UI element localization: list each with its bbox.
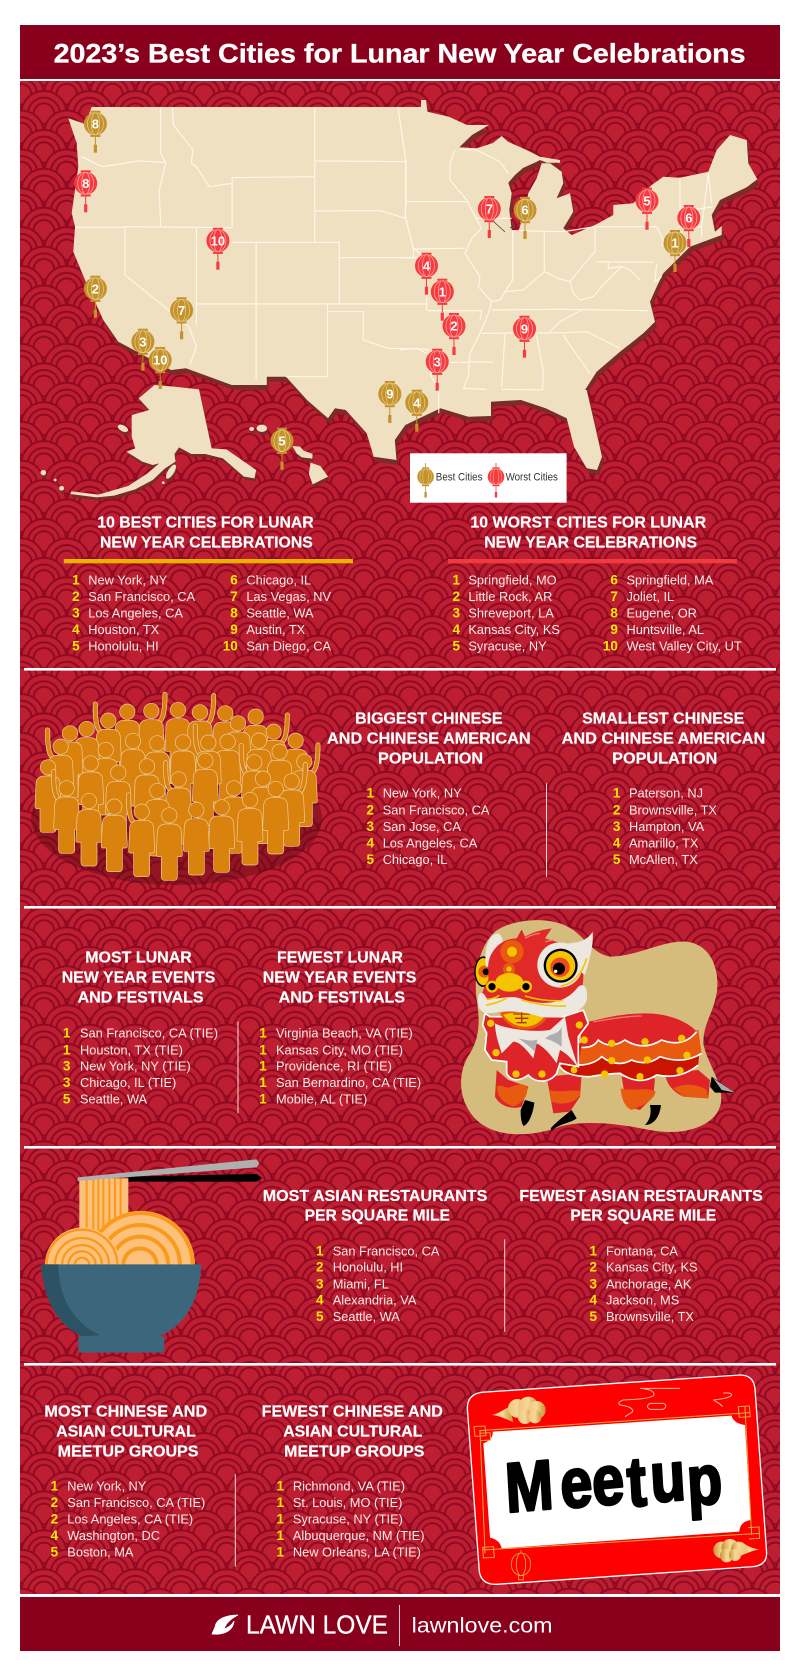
heading: fewest meetup groups: MEETUP GROUPS <box>284 1443 425 1460</box>
list: fewest restaurants: Kansas City, KS <box>606 1260 698 1275</box>
legend best lantern <box>417 463 434 498</box>
best city lanterns: 4 <box>413 395 421 410</box>
title banner: 2023’s Best Cities for Lunar New Year Celebrations <box>54 39 746 69</box>
grey chopstick <box>78 1159 259 1181</box>
list: smallest population: 1 <box>613 786 621 801</box>
list: fewest events: Providence, RI (TIE) <box>276 1059 392 1074</box>
best city lanterns: 10 <box>153 353 167 368</box>
noodle coils <box>45 1211 195 1265</box>
best city lanterns: 6 <box>521 203 529 218</box>
list: fewest restaurants: 1 <box>589 1243 597 1258</box>
list: fewest meetup groups: New Orleans, LA (TIE) <box>293 1545 421 1560</box>
list: most events: 3 <box>63 1059 71 1074</box>
best city lanterns: 9 <box>386 387 393 402</box>
heading: most events: AND FESTIVALS <box>78 989 204 1006</box>
list: fewest events: 1 <box>259 1075 267 1090</box>
heading: 10 worst cities: NEW YEAR CELEBRATIONS <box>484 534 697 551</box>
lion beard <box>495 1017 578 1068</box>
worst city lanterns: 5 <box>643 193 651 208</box>
brand name: LAWN LOVE <box>246 1609 388 1639</box>
list: most events: Chicago, IL (TIE) <box>80 1075 176 1090</box>
list: biggest population <box>366 786 490 867</box>
list: 10 worst cities: Eugene, OR <box>626 606 697 621</box>
map legend: Worst Cities <box>506 471 558 483</box>
list: most meetup groups: 4 <box>51 1528 59 1543</box>
list: fewest meetup groups: St. Louis, MO (TIE) <box>293 1495 402 1510</box>
heading: 10 worst cities: 10 WORST CITIES FOR LUNAR <box>470 514 707 531</box>
list: biggest population: San Francisco, CA <box>383 802 490 817</box>
worst city lanterns: 10 <box>211 233 225 248</box>
heading: fewest restaurants: PER SQUARE MILE <box>570 1208 717 1225</box>
list: smallest population: 3 <box>613 819 621 834</box>
list: fewest restaurants: Fontana, CA <box>606 1243 678 1258</box>
list: most meetup groups: 1 <box>51 1478 59 1493</box>
list: smallest population: 2 <box>613 802 620 817</box>
list: fewest events: Mobile, AL (TIE) <box>276 1092 367 1107</box>
list: most meetup groups <box>51 1478 205 1560</box>
black chopstick <box>128 1174 262 1182</box>
list: fewest events <box>259 1026 421 1107</box>
list: most meetup groups: 2 <box>51 1495 58 1510</box>
list: most restaurants: Seattle, WA <box>333 1309 400 1324</box>
Meetup wordmark: Meetup <box>503 1436 724 1528</box>
list: 10 worst cities: 5 <box>452 639 460 654</box>
list: 10 worst cities: 4 <box>452 622 460 637</box>
list: 10 worst cities: 10 <box>603 639 618 654</box>
lion legs <box>495 1070 735 1131</box>
list: fewest events: Virginia Beach, VA (TIE) <box>276 1026 413 1041</box>
list: most events: Seattle, WA <box>80 1092 148 1107</box>
heading: most restaurants <box>263 1188 488 1225</box>
best city lanterns <box>84 111 686 470</box>
list: 10 worst cities: Huntsville, AL <box>626 622 704 637</box>
list: fewest restaurants: 5 <box>589 1309 597 1324</box>
list: 10 worst cities: 2 <box>452 589 460 604</box>
list: 10 best cities: 8 <box>230 606 238 621</box>
worst city lanterns: 1 <box>439 284 446 299</box>
heading: fewest meetup groups: ASIAN CULTURAL <box>283 1424 423 1441</box>
list: fewest meetup groups: Syracuse, NY (TIE) <box>293 1511 403 1526</box>
list: 10 worst cities: Shreveport, LA <box>468 606 554 621</box>
list: biggest population: Chicago, IL <box>383 852 447 867</box>
heading: fewest meetup groups <box>262 1404 443 1460</box>
list: most restaurants: Alexandria, VA <box>333 1293 417 1308</box>
worst city lanterns: 6 <box>685 211 692 226</box>
list: 10 worst cities: 9 <box>610 622 618 637</box>
heading: biggest population <box>327 710 531 767</box>
list: fewest events: 1 <box>259 1042 267 1057</box>
list: smallest population: Brownsville, TX <box>629 802 717 817</box>
Lake Michigan connector lines <box>493 221 522 232</box>
list: fewest events: Kansas City, MO (TIE) <box>276 1042 403 1057</box>
illustration: lion dance <box>461 920 735 1134</box>
worst city lanterns: 9 <box>521 321 528 336</box>
gold clouds <box>492 1397 759 1562</box>
heading: most events: MOST LUNAR <box>85 950 192 967</box>
heading: fewest events <box>263 950 417 1006</box>
list: fewest meetup groups: 1 <box>276 1528 284 1543</box>
heading: 10 best cities: NEW YEAR CELEBRATIONS <box>100 534 313 551</box>
list: fewest events: 1 <box>259 1026 267 1041</box>
list: smallest population: Amarillo, TX <box>629 836 699 851</box>
list: fewest events: San Bernardino, CA (TIE) <box>276 1075 421 1090</box>
heading: fewest restaurants <box>519 1188 763 1225</box>
eastern state lines <box>400 149 713 390</box>
heading: 10 best cities: 10 BEST CITIES FOR LUNAR <box>97 514 314 531</box>
yellow underline bar <box>64 559 353 563</box>
list: biggest population: 2 <box>366 802 374 817</box>
map of the United States with lanterns <box>41 100 759 500</box>
list: fewest restaurants: Jackson, MS <box>606 1293 679 1308</box>
tan blob background <box>461 920 721 1134</box>
heading: fewest events: FEWEST LUNAR <box>277 950 403 967</box>
list: 10 best cities: Honolulu, HI <box>88 639 159 654</box>
list: 10 worst cities: Little Rock, AR <box>468 589 552 604</box>
map legend <box>410 453 567 503</box>
footer <box>20 1597 780 1651</box>
best city lanterns: 5 <box>278 433 286 448</box>
list: fewest restaurants: 4 <box>589 1293 597 1308</box>
list: most events <box>63 1026 218 1107</box>
list: smallest population: 5 <box>613 852 621 867</box>
heading: fewest events: NEW YEAR EVENTS <box>263 970 417 987</box>
list: 10 worst cities: 3 <box>452 606 460 621</box>
list: most restaurants: 5 <box>316 1309 324 1324</box>
worst city lanterns <box>74 170 700 391</box>
list: 10 worst cities: 6 <box>610 572 618 587</box>
Alaska and Hawaii <box>41 385 328 497</box>
worst city lanterns: 3 <box>434 354 441 369</box>
heading: fewest restaurants: FEWEST ASIAN RESTAURANTS <box>519 1188 763 1205</box>
list: biggest population: 3 <box>366 819 374 834</box>
best city lanterns: 3 <box>139 334 147 349</box>
heading: 10 best cities <box>97 514 314 551</box>
best city lanterns: 7 <box>178 303 185 318</box>
lion head <box>474 928 593 1018</box>
list: fewest meetup groups: Albuquerque, NM (TIE) <box>293 1528 424 1543</box>
list: smallest population: 4 <box>613 836 621 851</box>
list: most events: 3 <box>63 1075 71 1090</box>
list: most meetup groups: 5 <box>51 1545 59 1560</box>
list: biggest population: New York, NY <box>383 786 462 801</box>
list: biggest population: Los Angeles, CA <box>383 836 478 851</box>
heading: fewest events: AND FESTIVALS <box>279 989 405 1006</box>
list: most restaurants: 4 <box>316 1293 324 1308</box>
list: most events: San Francisco, CA (TIE) <box>80 1026 218 1041</box>
heading: fewest meetup groups: FEWEST CHINESE AND <box>262 1404 443 1421</box>
list: most restaurants: Honolulu, HI <box>333 1260 403 1275</box>
list: most events: Houston, TX (TIE) <box>80 1042 183 1057</box>
list: 10 best cities: Chicago, IL <box>246 572 311 587</box>
worst city lanterns: 7 <box>486 202 493 217</box>
icon: crowd of people <box>31 694 322 885</box>
list: fewest meetup groups: 1 <box>276 1511 284 1526</box>
list: most restaurants: San Francisco, CA <box>333 1243 440 1258</box>
heading: most restaurants: PER SQUARE MILE <box>305 1208 450 1225</box>
website: lawnlove.com <box>412 1614 552 1638</box>
list: 10 worst cities: Syracuse, NY <box>468 639 547 654</box>
list: 10 worst cities: Joliet, IL <box>626 589 674 604</box>
swirl decoration <box>619 1388 732 1417</box>
gold frame <box>474 1406 760 1558</box>
list: fewest restaurants: 2 <box>589 1260 597 1275</box>
list: 10 best cities: 1 <box>72 572 80 587</box>
heading: most restaurants: MOST ASIAN RESTAURANTS <box>263 1188 488 1205</box>
list: 10 best cities: San Diego, CA <box>246 639 332 654</box>
list: 10 worst cities: West Valley City, UT <box>626 639 742 654</box>
heading: most events: NEW YEAR EVENTS <box>62 970 216 987</box>
list: 10 best cities: New York, NY <box>88 572 168 587</box>
list: most events: 1 <box>63 1042 71 1057</box>
list: 10 best cities: 3 <box>72 606 80 621</box>
list: 10 best cities: 2 <box>72 589 80 604</box>
heading: smallest population: AND CHINESE AMERICAN <box>562 730 765 747</box>
list: most restaurants: 3 <box>316 1276 324 1291</box>
lion mouth <box>500 1010 548 1029</box>
list: smallest population <box>613 786 717 867</box>
small lantern outline <box>511 1550 531 1580</box>
worst city lanterns: 4 <box>423 258 431 273</box>
list: biggest population: 5 <box>366 852 374 867</box>
list: most events: 5 <box>63 1092 71 1107</box>
heading: smallest population <box>562 710 765 767</box>
list: 10 worst cities: Springfield, MA <box>626 572 714 587</box>
contiguous US landmass <box>68 100 757 470</box>
heading: 10 worst cities <box>470 514 707 551</box>
lion body <box>560 1013 702 1080</box>
list: most meetup groups: 2 <box>51 1511 58 1526</box>
list: most meetup groups: San Francisco, CA (TIE) <box>67 1495 205 1510</box>
western state lines <box>75 107 469 413</box>
list: 10 best cities: Houston, TX <box>88 622 160 637</box>
list: 10 best cities: Seattle, WA <box>246 606 314 621</box>
list: fewest events: 1 <box>259 1092 267 1107</box>
lion mane and chest <box>483 1010 588 1081</box>
list: most events: New York, NY (TIE) <box>80 1059 191 1074</box>
list: most meetup groups: New York, NY <box>67 1478 147 1493</box>
heading: most events <box>62 950 216 1006</box>
heading: biggest population: BIGGEST CHINESE <box>355 710 503 727</box>
list: 10 best cities: 10 <box>223 639 238 654</box>
heading: smallest population: SMALLEST CHINESE <box>582 710 745 727</box>
list: most restaurants: 2 <box>316 1260 324 1275</box>
list: smallest population: Hampton, VA <box>629 819 705 834</box>
list: fewest meetup groups: 1 <box>276 1495 284 1510</box>
list: fewest restaurants: Brownsville, TX <box>606 1309 694 1324</box>
list: fewest meetup groups: Richmond, VA (TIE) <box>293 1478 405 1493</box>
list: 10 best cities <box>72 572 332 654</box>
list: fewest restaurants <box>589 1243 698 1324</box>
list: 10 worst cities: 7 <box>610 589 618 604</box>
map legend: Best Cities <box>436 471 483 483</box>
red underline bar <box>448 559 737 563</box>
worst city lanterns: 8 <box>82 176 89 191</box>
worst city lanterns: 2 <box>450 319 458 334</box>
best city lanterns: 8 <box>92 116 99 131</box>
list: 10 best cities: 7 <box>230 589 238 604</box>
list: 10 best cities: Las Vegas, NV <box>246 589 332 604</box>
list: biggest population: 4 <box>366 836 374 851</box>
legend worst lantern <box>488 463 504 498</box>
list: most restaurants <box>316 1243 440 1324</box>
list: 10 worst cities: Kansas City, KS <box>468 622 560 637</box>
list: fewest restaurants: 3 <box>589 1276 597 1291</box>
heading: biggest population: AND CHINESE AMERICAN <box>327 730 531 747</box>
list: 10 worst cities: 1 <box>452 572 460 587</box>
red card <box>467 1375 767 1584</box>
list: 10 best cities: San Francisco, CA <box>88 589 195 604</box>
title banner <box>20 25 780 79</box>
hanging noodles <box>79 1178 128 1233</box>
list: fewest meetup groups: 1 <box>276 1478 284 1493</box>
map shadow <box>42 105 759 500</box>
heading: most meetup groups: MEETUP GROUPS <box>58 1443 199 1460</box>
list: smallest population: McAllen, TX <box>629 852 698 867</box>
list: most restaurants: 1 <box>316 1243 324 1258</box>
list: most meetup groups: Washington, DC <box>67 1528 160 1543</box>
list: 10 worst cities <box>452 572 742 654</box>
list: most events: 1 <box>63 1026 71 1041</box>
list: most meetup groups: Boston, MA <box>67 1545 134 1560</box>
heading: most meetup groups: ASIAN CULTURAL <box>56 1424 196 1441</box>
heading: most meetup groups <box>44 1404 207 1460</box>
list: most restaurants: Miami, FL <box>333 1276 389 1291</box>
list: 10 best cities: Austin, TX <box>246 622 306 637</box>
list: 10 best cities: 9 <box>230 622 238 637</box>
list: biggest population: San Jose, CA <box>383 819 461 834</box>
icon: noodle bowl with chopsticks <box>41 1159 262 1353</box>
list: 10 best cities: 5 <box>72 639 80 654</box>
bowl <box>41 1264 201 1353</box>
logo leaf icon <box>212 1615 238 1634</box>
list: most meetup groups: Los Angeles, CA (TIE) <box>67 1511 193 1526</box>
heading: biggest population: POPULATION <box>378 750 483 767</box>
heading: most meetup groups: MOST CHINESE AND <box>44 1404 207 1421</box>
heading: smallest population: POPULATION <box>612 750 717 767</box>
list: 10 worst cities: Springfield, MO <box>468 572 557 587</box>
list: 10 best cities: Los Angeles, CA <box>88 606 183 621</box>
list: fewest restaurants: Anchorage, AK <box>606 1276 692 1291</box>
list: fewest meetup groups <box>276 1478 424 1560</box>
list: 10 best cities: 4 <box>72 622 80 637</box>
best city lanterns: 1 <box>671 236 679 251</box>
list: fewest meetup groups: 1 <box>276 1545 284 1560</box>
list: 10 best cities: 6 <box>230 572 238 587</box>
best city lanterns: 2 <box>92 281 99 296</box>
list: smallest population: Paterson, NJ <box>629 786 703 801</box>
list: fewest events: 1 <box>259 1059 267 1074</box>
list: 10 worst cities: 8 <box>610 606 618 621</box>
list: biggest population: 1 <box>366 786 374 801</box>
white name area <box>483 1416 751 1548</box>
illustration: meetup name tag <box>467 1375 767 1584</box>
